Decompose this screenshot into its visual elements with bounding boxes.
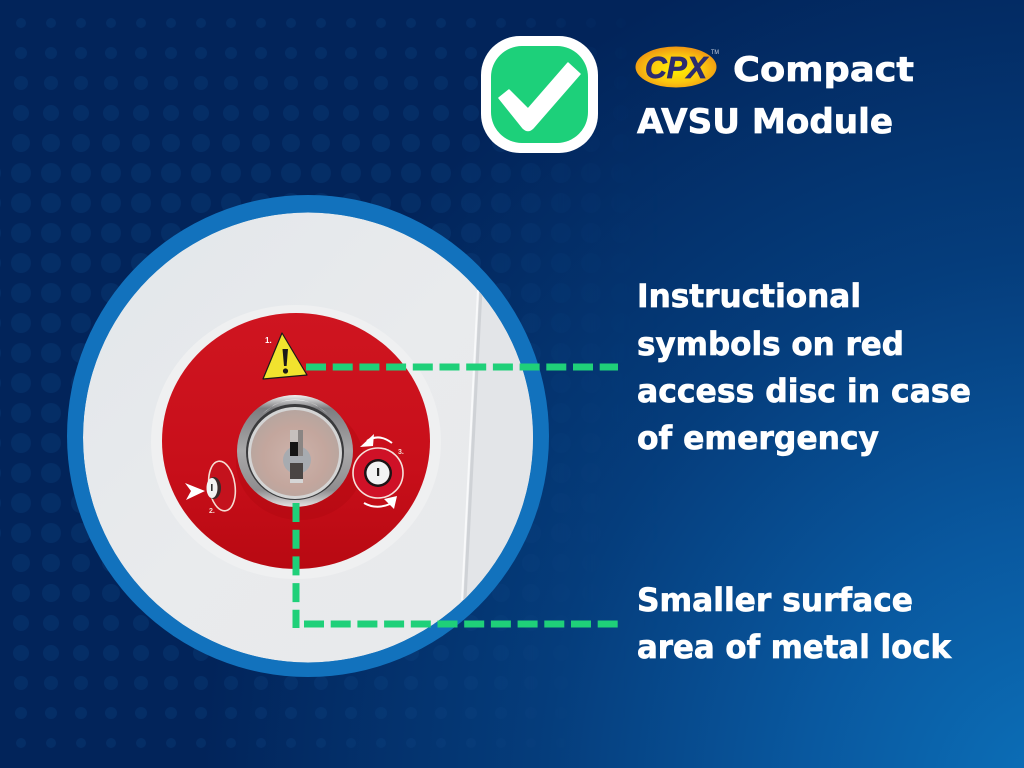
icon: push key step: 2.: [209, 508, 215, 515]
logo: CPX: [636, 46, 719, 88]
metal lock: [237, 395, 353, 507]
callout: metal lock: area of metal lock: [637, 628, 952, 666]
icon: warning triangle: 1.: [265, 336, 272, 345]
icon: warning triangle: [263, 333, 307, 379]
white enclosure: [83, 212, 540, 662]
callout: instructional symbols: Instructional: [637, 277, 861, 315]
logo: CPX: TM: [711, 50, 719, 56]
ring border: [67, 195, 549, 677]
icon: green check badge: [481, 36, 598, 153]
icon: turn key step: 3.: [398, 449, 404, 456]
panel: circular lock photo: [67, 195, 549, 677]
callout: metal lock: [637, 581, 952, 666]
leader line: instructional symbols: [306, 364, 618, 370]
red access disc: [162, 313, 430, 569]
title: Compact: [733, 50, 914, 90]
callout: metal lock: Smaller surface: [637, 581, 913, 619]
icon: push key step: [185, 459, 238, 515]
leader line: metal lock: [296, 503, 618, 628]
callout: instructional symbols: access disc in case: [637, 372, 971, 410]
title: AVSU Module: [637, 102, 893, 142]
title: [637, 50, 914, 142]
callout: instructional symbols: symbols on red: [637, 325, 904, 363]
icon: turn key step: [353, 434, 404, 509]
lock shadow: [236, 404, 364, 520]
logo: CPX: CPX: [645, 50, 709, 85]
halftone dot pattern: [0, 18, 508, 748]
recess lip: [151, 305, 441, 579]
callout: instructional symbols: of emergency: [637, 419, 879, 457]
callout: instructional symbols: [637, 277, 971, 457]
